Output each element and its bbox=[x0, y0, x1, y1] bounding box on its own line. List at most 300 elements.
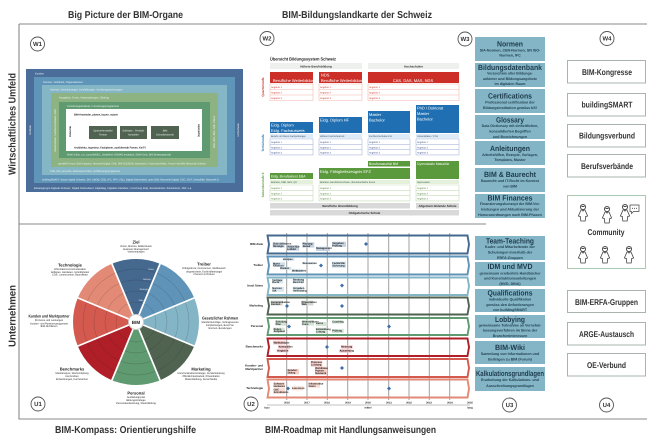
row: Gesetzlicher Rahmen: Best-Fair bbox=[293, 281, 304, 284]
row: Personal: Personal bbox=[251, 324, 263, 328]
nested diagram: Big Picture der BIM-Organe: CCB, SIA, Eurocode, Dokumente RACE, Zertifizierungsprogramme bbox=[50, 170, 121, 173]
box: buildingSMART bbox=[568, 94, 646, 116]
row: Gesetzlicher Rahmen: Umsetzung bbox=[293, 289, 307, 292]
nested diagram: Big Picture der BIM-Organe: Institute bbox=[29, 124, 32, 135]
box: Bildungsdatenbank: anbieter und Bildungsangebote bbox=[483, 77, 537, 81]
nested diagram: Big Picture der BIM-Organe: Forschungsinstitute, Forschungsprogramme bbox=[67, 105, 120, 108]
row: Technologie: Hardware bbox=[274, 385, 286, 388]
box: Bildungsverbund bbox=[568, 124, 646, 147]
tier: Quartärstufe: Angebot 1 bbox=[271, 86, 283, 89]
box: Bildungsdatenbank: Bildungsdatenbank bbox=[478, 63, 543, 72]
row: BIM-Ziele: Vision klar bbox=[287, 245, 300, 248]
box: Community: Community bbox=[588, 227, 625, 237]
timeline axis: 2024 bbox=[447, 402, 453, 404]
box: Berufsverbände bbox=[568, 154, 646, 177]
box: Lobbying: Brancheninteressen bbox=[493, 334, 527, 338]
label: Treiber: Erfolgsdruck, Ressourcen, Wettbewerb bbox=[182, 267, 226, 270]
chart: Übersicht Bildungssystem Schweiz bbox=[261, 56, 459, 216]
box: BIM & Baurecht: von BIM bbox=[503, 184, 517, 188]
tier: Quartärstufe: Quartärstufe bbox=[261, 77, 265, 97]
box: BIM & Baurecht: Baurecht und IT-Recht im Kontext bbox=[481, 179, 540, 183]
label: Benchmarks: Entwicklungen, Kennzeichen bbox=[56, 378, 89, 381]
tier: Sekundarstufe II: Angebot 2 bbox=[417, 192, 429, 195]
tier: Sekundarstufe II: Eidg. Berufsattest EBA bbox=[271, 174, 306, 178]
tier: Quartärstufe: Angebot 2 bbox=[271, 92, 283, 94]
row: Marketing: Marketing bbox=[249, 304, 263, 308]
tier: Tertiärstufe: Angebot 3 bbox=[320, 152, 332, 155]
row: Kunden und Marktpartner: Kunden bbox=[288, 369, 297, 372]
row: Benchmarks: Messung bbox=[341, 346, 353, 349]
label: Treiber bbox=[182, 262, 226, 276]
label: Marketing bbox=[178, 366, 225, 381]
tier: Tertiärstufe: Bachelor bbox=[417, 116, 433, 122]
label: Marketing: Markenbildung, Social Media bbox=[185, 378, 218, 381]
badge W2: W2 bbox=[262, 36, 272, 42]
row: Personal: Weiterbildung bbox=[302, 320, 319, 324]
tier: Tertiärstufe: Bachelor bbox=[369, 118, 385, 122]
box: Certifications: Certifications bbox=[488, 92, 532, 100]
nested diagram: Big Picture der BIM-Organe: Hochschulen bbox=[237, 122, 240, 137]
chart: Übersicht Bildungssystem Schweiz: Höhere Berufsbildung bbox=[300, 64, 332, 68]
label: Ziel: Business Management bbox=[123, 248, 149, 251]
box: Certifications: Professional certification der bbox=[485, 100, 535, 104]
tier: Tertiärstufe: Angebot 1 bbox=[417, 141, 429, 144]
label: Benchmarks: Kennzahlen bbox=[65, 375, 79, 378]
tier: Sekundarstufe II: Berufsmaturität BM bbox=[369, 162, 398, 166]
box: IDM und MVD bbox=[475, 262, 545, 286]
row: Treiber: Ressourcen bbox=[303, 262, 317, 265]
row: Marketing: Web bbox=[302, 303, 307, 306]
box: BIM Finances bbox=[475, 194, 545, 218]
label: Kunden und Marktpartner: Kunden- und Partnermanagement bbox=[30, 322, 68, 326]
tier: Sekundarstufe II: Sekundarstufe II bbox=[261, 172, 265, 197]
row: Gesetzlicher Rahmen: Normen bbox=[272, 287, 282, 290]
title: BIM-Kompass: BIM-Kompass: Orientierungshilfe bbox=[55, 425, 196, 436]
row: Treiber: Markt bbox=[273, 262, 280, 265]
tier: Tertiärstufe: Angebot 2 bbox=[271, 146, 283, 149]
box: Bildungsdatenbank: im digitalen Raum bbox=[495, 82, 525, 86]
title: Big Picture der BIM-Organe: Big Picture der BIM-Organe bbox=[68, 10, 183, 21]
tier: Quartärstufe: NDS bbox=[321, 72, 330, 78]
label: Kunden und Marktpartner bbox=[28, 314, 70, 328]
row: Technologie: Technologie bbox=[246, 386, 263, 390]
nested diagram: Big Picture der BIM-Organe: buildingSMART, Bauen digital Schweiz, SIA, KBOB, CRB, IFC, PPP, VSLI, Digital Switzerland, open BIM, Netzwerk Digital, CSC, SVIT, SwissBIM, Netzwerk D bbox=[42, 178, 219, 182]
heading: Übersicht Bildungssystem: Übersicht Bildungssystem Schweiz bbox=[270, 56, 337, 62]
tier: Tertiärstufe: Berufs- & höhere Fachprüfungen bbox=[271, 135, 306, 138]
row: Personal: Leitung bbox=[316, 331, 325, 334]
row: Benchmarks: Kennzahlen bbox=[279, 346, 293, 349]
box: Glossary bbox=[475, 115, 545, 139]
nested diagram: Big Picture der BIM-Organe: Normen, Verbände, Organisationen bbox=[43, 81, 84, 84]
nested diagram: Big Picture der BIM-Organe: Mobil & Bau, u.a. Locus/BASEL, DeepMind, ROMAG-Institution, SBM-Circle, BIM-Beratungsrunde bbox=[67, 154, 172, 156]
box: Bildungsverbund: Bildungsverbund bbox=[579, 130, 635, 140]
row: Technologie: Daten bbox=[309, 385, 316, 388]
row: BIM-Ziele: Vorgaben bbox=[332, 242, 344, 245]
row: Gesetzlicher Rahmen: Recht bbox=[272, 281, 279, 284]
row: Personal: Kurse bbox=[316, 322, 324, 325]
nested diagram: Big Picture der BIM-Organe: Firmen bbox=[99, 134, 108, 136]
tier: Sekundarstufe II: Gymnasium bbox=[417, 181, 430, 184]
label: Benchmarks bbox=[55, 366, 89, 381]
badge W2 bbox=[260, 32, 274, 46]
tier: Tertiärstufe: PhD / Doktorat bbox=[417, 106, 444, 110]
row: BIM-Ziele bbox=[250, 236, 469, 254]
nested diagram: Big Picture der BIM-Organe: Software-, Produkt- bbox=[122, 130, 145, 132]
box: BIM & Baurecht: BIM & Baurecht bbox=[484, 170, 536, 179]
tier: Tertiärstufe: Universitäten / ETH bbox=[417, 135, 438, 138]
box: Glossary: Data Dictionary mit einheitlichen, bbox=[482, 124, 538, 128]
tier: Sekundarstufe II: Angebot 2 bbox=[271, 192, 283, 195]
badge W1 bbox=[30, 37, 44, 51]
axis label: Unternehmen: Unternehmen bbox=[8, 285, 18, 347]
box: Qualifications: gemäss den Anforderungen bbox=[486, 303, 534, 307]
row: Gesetzlicher Rahmen: Beratung bbox=[293, 278, 304, 282]
label: Gesetzlicher Rahmen: Normen, Beratungen bbox=[208, 327, 232, 330]
box: BIM-Wiki: Sammlung von Informationen und bbox=[481, 352, 539, 356]
timeline axis: 2019 bbox=[345, 402, 351, 404]
row: Treiber: Wettbewerb bbox=[292, 269, 307, 272]
box: Normen bbox=[475, 37, 545, 61]
tier: Tertiärstufe: Master bbox=[369, 112, 382, 117]
label: Benchmarks: Benchmarks bbox=[60, 366, 85, 372]
badge U4: U4 bbox=[603, 402, 611, 409]
axis label: Wirtschaftliches Umfeld: Wirtschaftliches Umfeld bbox=[8, 73, 18, 175]
badge W4 bbox=[600, 32, 614, 46]
tier: Tertiärstufe: Höhere Fachschule HF bbox=[320, 135, 345, 138]
milestone diamonds bbox=[285, 242, 391, 390]
row: Kunden und Marktpartner: Netzwerk bbox=[315, 372, 327, 375]
box: Berufsverbände: Berufsverbände bbox=[581, 161, 633, 171]
row: BIM-Ziele: Ziele definieren bbox=[273, 242, 292, 246]
chart: BIM-Kompass radial wheel: Strategie bbox=[140, 288, 149, 291]
row: Marketing: Präsentation bbox=[302, 301, 317, 304]
badge W4: W4 bbox=[602, 36, 612, 42]
label: Personal: Personalentwicklung, Weiterbildung bbox=[116, 402, 156, 405]
nested diagram: Big Picture der BIM-Organe: openBIM-Forum, BIM-Kongress, Netzwerk Digital, CRB, SMFCDESIGN, Netzwerk D, Fachzeitschriften, Forum Holz/BIM Wirtschaft Schweiz bbox=[58, 162, 207, 166]
box: BIM-ERFA-Gruppen: BIM-ERFA-Gruppen bbox=[575, 297, 638, 307]
foundation bars: Berufliche Grundbildung bbox=[322, 204, 358, 208]
tier: Tertiärstufe bbox=[261, 105, 459, 155]
row: BIM-Ziele: Prüfung bbox=[332, 244, 342, 247]
box: Lobbying: gemeinsame Teilnahme an Vernehm- bbox=[479, 323, 542, 327]
row: Kunden und Marktpartner: Leistung bbox=[311, 364, 322, 367]
box: Team-Teaching: Kader- und Mitarbeitende der bbox=[485, 245, 536, 249]
box: Normen: Normen bbox=[497, 40, 523, 48]
timeline axis: 2023 bbox=[426, 402, 432, 404]
box: Lobbying: Lobbying bbox=[495, 315, 525, 324]
label: Marketing: Marketing bbox=[191, 366, 211, 372]
tier: Sekundarstufe II: Angebot 1 bbox=[320, 187, 332, 190]
tier: Sekundarstufe II: Angebot 3 bbox=[417, 198, 429, 201]
label: Technologie: Informations-Kommunikation bbox=[54, 268, 87, 271]
box: IDM und MVD: IDM und MVD bbox=[488, 262, 533, 271]
title: BIM-Roadmap: BIM-Roadmap mit Handlungsanweisungen bbox=[265, 425, 436, 436]
tier: Tertiärstufe: Angebot 3 bbox=[271, 152, 283, 155]
badge U2 bbox=[244, 397, 258, 411]
label: Marketing: Kommunikationsstrategie, Kundenbindung bbox=[178, 372, 225, 375]
tier: Sekundarstufe II: Gymnasiale Maturität bbox=[417, 162, 449, 166]
label: Ziel: Ziel bbox=[132, 240, 140, 244]
box: Kalkulationsgrundlagen: Erarbeitung der Kalkulations- und bbox=[481, 378, 539, 382]
box: BIM-Wiki: BIM-Wiki bbox=[495, 343, 525, 352]
label: Ziel: Vision, Mission, Bildkonturen bbox=[120, 245, 153, 248]
nested diagram: Big Picture der BIM-Organe: Systemhersteller bbox=[93, 130, 113, 132]
tier: Tertiärstufe: Eidg. Diplom HF bbox=[320, 118, 350, 122]
box: Lobbying: lassungsverfahren im Sinne der bbox=[483, 328, 538, 332]
nested diagram: Big Picture der BIM-Organe: BIG, IBU, IBO, SIA, Plans bbox=[213, 115, 216, 148]
box: IDM und MVD: (MVD, DINA) bbox=[499, 282, 521, 286]
box: Kalkulationsgrundlagen bbox=[475, 367, 545, 391]
timeline axis bbox=[264, 402, 473, 410]
row: Kunden und Marktpartner bbox=[245, 359, 469, 377]
box: Community bbox=[568, 196, 646, 268]
badge U2: U2 bbox=[247, 401, 255, 408]
tier: Quartärstufe: Angebot 3 bbox=[271, 97, 283, 100]
nested diagram: Big Picture der BIM-Organe bbox=[26, 69, 243, 192]
tier: Sekundarstufe II: Angebot 3 bbox=[320, 198, 332, 201]
nested diagram: Big Picture der BIM-Organe: Universitäten, Fachhochschulen, BFS bbox=[54, 109, 57, 152]
box: Kalkulationsgrundlagen: Ausschreibungsgrundlagen bbox=[486, 384, 534, 388]
nested diagram: Big Picture der BIM-Organe: Architektur, Ingenieur, Fachplaner, ausführende Firmen, KinTV bbox=[74, 146, 146, 150]
row: BIM-Ziele: Management bbox=[316, 247, 332, 250]
label: Kunden und Marktpartner: Prozesse und Leistungen bbox=[35, 319, 64, 322]
row: Treiber: Risiken bbox=[280, 267, 290, 270]
tier: Sekundarstufe II: Angebot 1 bbox=[271, 187, 283, 190]
row: Treiber: Treiber bbox=[253, 263, 264, 267]
label: Personal: Ausbildungsplan bbox=[127, 396, 146, 399]
box: Qualifications: individuelle Qualifikation bbox=[489, 297, 531, 301]
box: IDM und MVD: gemeinsam erarbeitete Handbücher bbox=[479, 272, 541, 276]
label: Personal: Bildungsstrategie bbox=[126, 399, 146, 402]
tier: Tertiärstufe: Angebot 1 bbox=[369, 141, 381, 144]
row: Marketing: Kommunikation bbox=[271, 301, 290, 304]
row: Personal: Aufgaben bbox=[274, 330, 286, 333]
box: Qualifications bbox=[475, 288, 545, 312]
row: Gesetzlicher Rahmen: SIA bbox=[272, 289, 277, 292]
row: Technologie: Schnittstelle bbox=[274, 391, 289, 394]
tier: Tertiärstufe: Tertiärstufe bbox=[261, 134, 265, 152]
timeline axis: kurz bbox=[264, 406, 270, 410]
row: Treiber: Sicherung bbox=[332, 265, 345, 268]
nested diagram: Big Picture der BIM-Organe: BIM bbox=[163, 130, 167, 132]
row: BIM-Ziele: Ablauf bbox=[303, 245, 311, 248]
badge U4 bbox=[600, 398, 614, 412]
row: BIM-Ziele: Leitbild bbox=[287, 248, 296, 251]
tier: Tertiärstufe: Master bbox=[417, 111, 430, 116]
tier: Tertiärstufe: Angebot 3 bbox=[369, 152, 381, 155]
row: Personal: Plan bbox=[276, 323, 281, 326]
label: Technologie: CDE, Laserscanner, BauroBoter bbox=[52, 274, 88, 276]
box: BIM-Wiki bbox=[475, 341, 545, 364]
tier: Tertiärstufe: Angebot 3 bbox=[417, 152, 429, 155]
label: Kunden und Marktpartner: BIM-Richtlinien bbox=[41, 325, 58, 328]
panel W3: knowledge boxes bbox=[475, 37, 545, 391]
badge U3 bbox=[502, 398, 516, 412]
tier: Sekundarstufe II: Betriebe, Berufsfachschulen, überbetriebliche Kurse bbox=[320, 181, 376, 184]
box: Glossary: konsolidierten Begriffen bbox=[489, 130, 531, 134]
tier: Quartärstufe: Angebot 1 bbox=[369, 86, 381, 89]
box: Glossary: Glossary bbox=[496, 116, 525, 124]
row: Personal: Schulung bbox=[276, 320, 287, 323]
box: Anleitungen: Templates, Muster bbox=[494, 158, 526, 162]
row: Benchmarks: Vergleich bbox=[277, 350, 289, 353]
tier: Sekundarstufe II bbox=[261, 161, 459, 201]
tier: Quartärstufe: Angebot 3 bbox=[320, 97, 332, 100]
row: Treiber: Fachkräfte bbox=[332, 262, 346, 265]
label: Gesetzlicher Rahmen: Standardverträge, Vertragswesen bbox=[201, 321, 239, 324]
box: Team-Teaching: Team-Teaching bbox=[486, 236, 534, 245]
nested diagram: Big Picture der BIM-Organe: Industrie bbox=[69, 125, 72, 137]
badge W1: W1 bbox=[33, 41, 43, 48]
tier: Sekundarstufe II: Angebot 1 bbox=[417, 187, 429, 190]
badge U3: U3 bbox=[506, 402, 514, 409]
icon: speech bubble bbox=[630, 205, 639, 214]
label: Kunden und Marktpartner: Kunden und Marktpartner bbox=[28, 314, 70, 318]
row: Personal bbox=[251, 318, 469, 335]
foundation bars: Allgemein bildende Schule bbox=[418, 204, 457, 208]
label: Treiber: Treiber bbox=[197, 262, 211, 266]
box: Qualifications: von buildingSMART bbox=[493, 308, 528, 312]
title: BIM-Bildungslandkarte der Schweiz: BIM-Bildungslandkarte der Schweiz bbox=[282, 10, 432, 21]
row: Kunden und Marktpartner: Kunden- und bbox=[245, 364, 263, 368]
box: Normen: SIA-Normen, CEN-Normen, SN ISO- bbox=[480, 48, 541, 52]
tier: Quartärstufe: Berufliche Weiterbildung bbox=[321, 78, 364, 83]
row: Kunden und Marktpartner: Marktpartner bbox=[245, 367, 264, 371]
box: IDM und MVD: und Konstruktionsanleitungen bbox=[484, 276, 536, 280]
row: Technologie bbox=[246, 380, 469, 398]
chart: BIM-Kompass radial wheel: BIM bbox=[132, 320, 140, 325]
tier: Quartärstufe: Angebot 3 bbox=[369, 97, 381, 100]
row: Kunden und Marktpartner: Dialog bbox=[288, 372, 296, 375]
row: Personal: Rollen bbox=[274, 328, 282, 331]
nested diagram: Big Picture der BIM-Organe: hersteller bbox=[128, 134, 139, 136]
row: BIM-Ziele: Strategie bbox=[273, 245, 284, 248]
row: Kunden und Marktpartner: Richtlinien bbox=[315, 367, 329, 370]
badge W3 bbox=[458, 32, 472, 46]
row: Technologie: Infrastruktur bbox=[309, 382, 323, 386]
row: Technologie: CDE bbox=[274, 389, 279, 392]
box: Kalkulationsgrundlagen: Kalkulationsgrundlagen bbox=[476, 369, 544, 378]
box: Lobbying bbox=[475, 315, 545, 338]
row: Treiber: Chancen bbox=[273, 264, 284, 267]
chart: Übersicht Bildungssystem Schweiz: Hochschulen bbox=[404, 64, 423, 68]
chart: BIM-Roadmap bbox=[245, 233, 473, 410]
box: Team-Teaching: ERFA-Gruppen bbox=[497, 256, 523, 260]
box: BIM-Wiki: Beiträgen zu BIM (Forum) bbox=[488, 358, 533, 362]
tier: Quartärstufe: CAS, DAS, MAS, NDS bbox=[393, 78, 433, 83]
row: Technologie: Software bbox=[274, 382, 285, 386]
badge U1: U1 bbox=[34, 401, 42, 408]
nested diagram: Big Picture der BIM-Organe: Organisation bbox=[198, 124, 200, 137]
box: BIM Finances: BIM Finances bbox=[488, 194, 532, 202]
chart: BIM-Kompass radial wheel: Ziele bbox=[139, 299, 144, 302]
row: Benchmarks: Benchmarks bbox=[246, 344, 263, 348]
box: Bildungsdatenbank: Verzeichnis aller Bildungs- bbox=[487, 72, 534, 76]
timeline axis: 2021 bbox=[386, 402, 392, 404]
tier: Sekundarstufe II: Eidg. Fähigkeitszeugnis EFZ bbox=[320, 169, 371, 174]
box: BIM & Baurecht bbox=[475, 168, 545, 192]
tier: Quartärstufe: Angebot 2 bbox=[320, 92, 332, 94]
nested diagram: Big Picture der BIM-Organe: Beiratsgruppe Digitale Schweiz, Digital Switzerland, Digitaltag, Digitales Manifest, Forschung Eidg. Bundesämter, Swissfuture, SNF u.a. bbox=[34, 187, 192, 190]
row: Kunden und Marktpartner: Partner bbox=[315, 370, 324, 372]
label: Gesetzlicher Rahmen bbox=[201, 316, 239, 330]
label: Ziel bbox=[120, 240, 153, 254]
row: Gesetzlicher Rahmen bbox=[247, 278, 469, 295]
badge U1 bbox=[31, 397, 45, 411]
row: Personal: Team bbox=[302, 323, 309, 326]
nested diagram: Big Picture der BIM-Organe: Normen, Vereinbarungen, Empfehlungen, Handlungsanweisungen bbox=[50, 88, 123, 92]
box: buildingSMART: buildingSMART bbox=[582, 100, 633, 110]
row: Marketing bbox=[249, 298, 469, 314]
box: Qualifications: Qualifications bbox=[488, 288, 532, 298]
row: Treiber: Analyse bbox=[283, 258, 293, 261]
panel W4/U4: organisations bbox=[568, 60, 646, 376]
box: ARGE-Austausch: ARGE-Austausch bbox=[579, 329, 634, 339]
tier: Tertiärstufe: Angebot 1 bbox=[320, 141, 332, 144]
box: ARGE-Austausch bbox=[568, 322, 646, 345]
timeline axis: mittel bbox=[365, 406, 372, 410]
row: Personal: Prüfung bbox=[332, 329, 342, 332]
row: Gesetzlicher Rahmen: Gesetzl. Rahmen bbox=[247, 284, 263, 288]
tier: Quartärstufe: Berufliche Weiterbildung bbox=[273, 78, 316, 83]
label: Technologie: Software, Hardware, Schnittstellen bbox=[51, 271, 90, 274]
label: Personal: Personal bbox=[127, 390, 145, 396]
box: Glossary: und Bezeichnungen bbox=[493, 135, 527, 139]
box: Anleitungen: Anleitungen bbox=[490, 144, 530, 153]
tier: Quartärstufe: Angebot 1 bbox=[320, 86, 332, 89]
row: Benchmarks: Marktanalyse bbox=[274, 341, 290, 344]
timeline axis: 2025 bbox=[467, 402, 473, 404]
tier: Tertiärstufe: Angebot 2 bbox=[320, 146, 332, 149]
box: OE-Verbund: OE-Verbund bbox=[587, 360, 626, 370]
tier: Sekundarstufe II: Angebot 3 bbox=[271, 198, 283, 201]
row: Gesetzlicher Rahmen: Verträge bbox=[272, 279, 283, 282]
box: Normen: Normen, IFC bbox=[499, 54, 521, 58]
row: Benchmarks: Auswertung bbox=[340, 350, 355, 353]
chart: BIM-Kompass radial wheel bbox=[73, 259, 199, 385]
box: Bildungsdatenbank bbox=[475, 63, 545, 87]
box: BIM Finances: leistungen und Aktualisierung der bbox=[481, 208, 540, 212]
row: Technologie: Laserscan bbox=[292, 387, 305, 390]
tier: Quartärstufe: Angebot 2 bbox=[369, 92, 381, 94]
nested diagram: Big Picture der BIM-Organe: Ausgaben, Foren, Veranstaltungen, Bildung bbox=[59, 96, 110, 100]
timeline grid lines bbox=[287, 233, 450, 400]
label: Treiber: Chancen & Risiken bbox=[193, 273, 215, 276]
row: BIM-Ziele: Planung bbox=[303, 242, 313, 246]
tier: Quartärstufe bbox=[261, 72, 459, 100]
tier: Sekundarstufe II: Betriebe, ÜBK, BFS, QV bbox=[271, 181, 297, 184]
timeline axis: 2017 bbox=[304, 402, 310, 404]
box: OE-Verbund bbox=[568, 354, 646, 376]
foundation bars bbox=[270, 203, 459, 216]
box: Certifications bbox=[475, 89, 545, 113]
nested diagram: Big Picture der BIM-Organe: Dienstleistende bbox=[156, 134, 174, 136]
timeline axis: 2020 bbox=[365, 402, 371, 404]
box: BIM-Kongresse bbox=[568, 60, 646, 83]
box: Team-Teaching bbox=[475, 236, 545, 260]
row: Personal: Coaching bbox=[332, 320, 344, 323]
box: Anleitungen: Arbeitshilfen, Rezepte, Vorlagen, bbox=[482, 153, 538, 157]
label: Gesetzlicher Rahmen: Empfehlungen, Best-Fair bbox=[206, 324, 234, 327]
box: Team-Teaching: Schulungen innerhalb der bbox=[488, 250, 533, 254]
label: Marketing: Öffentlichkeitsarbeit, Präsentation bbox=[182, 374, 220, 378]
box: Certifications: Bildungsinstitution gemäss bS! bbox=[483, 106, 537, 110]
box: BIM-Kongresse: BIM-Kongresse bbox=[582, 67, 632, 77]
label: Treiber: Ungewissheit, Fachkräftemangel bbox=[186, 270, 223, 274]
label: Personal bbox=[116, 390, 156, 405]
timeline axis: 2022 bbox=[406, 402, 412, 404]
tier: Tertiärstufe: Angebot 2 bbox=[417, 146, 429, 149]
